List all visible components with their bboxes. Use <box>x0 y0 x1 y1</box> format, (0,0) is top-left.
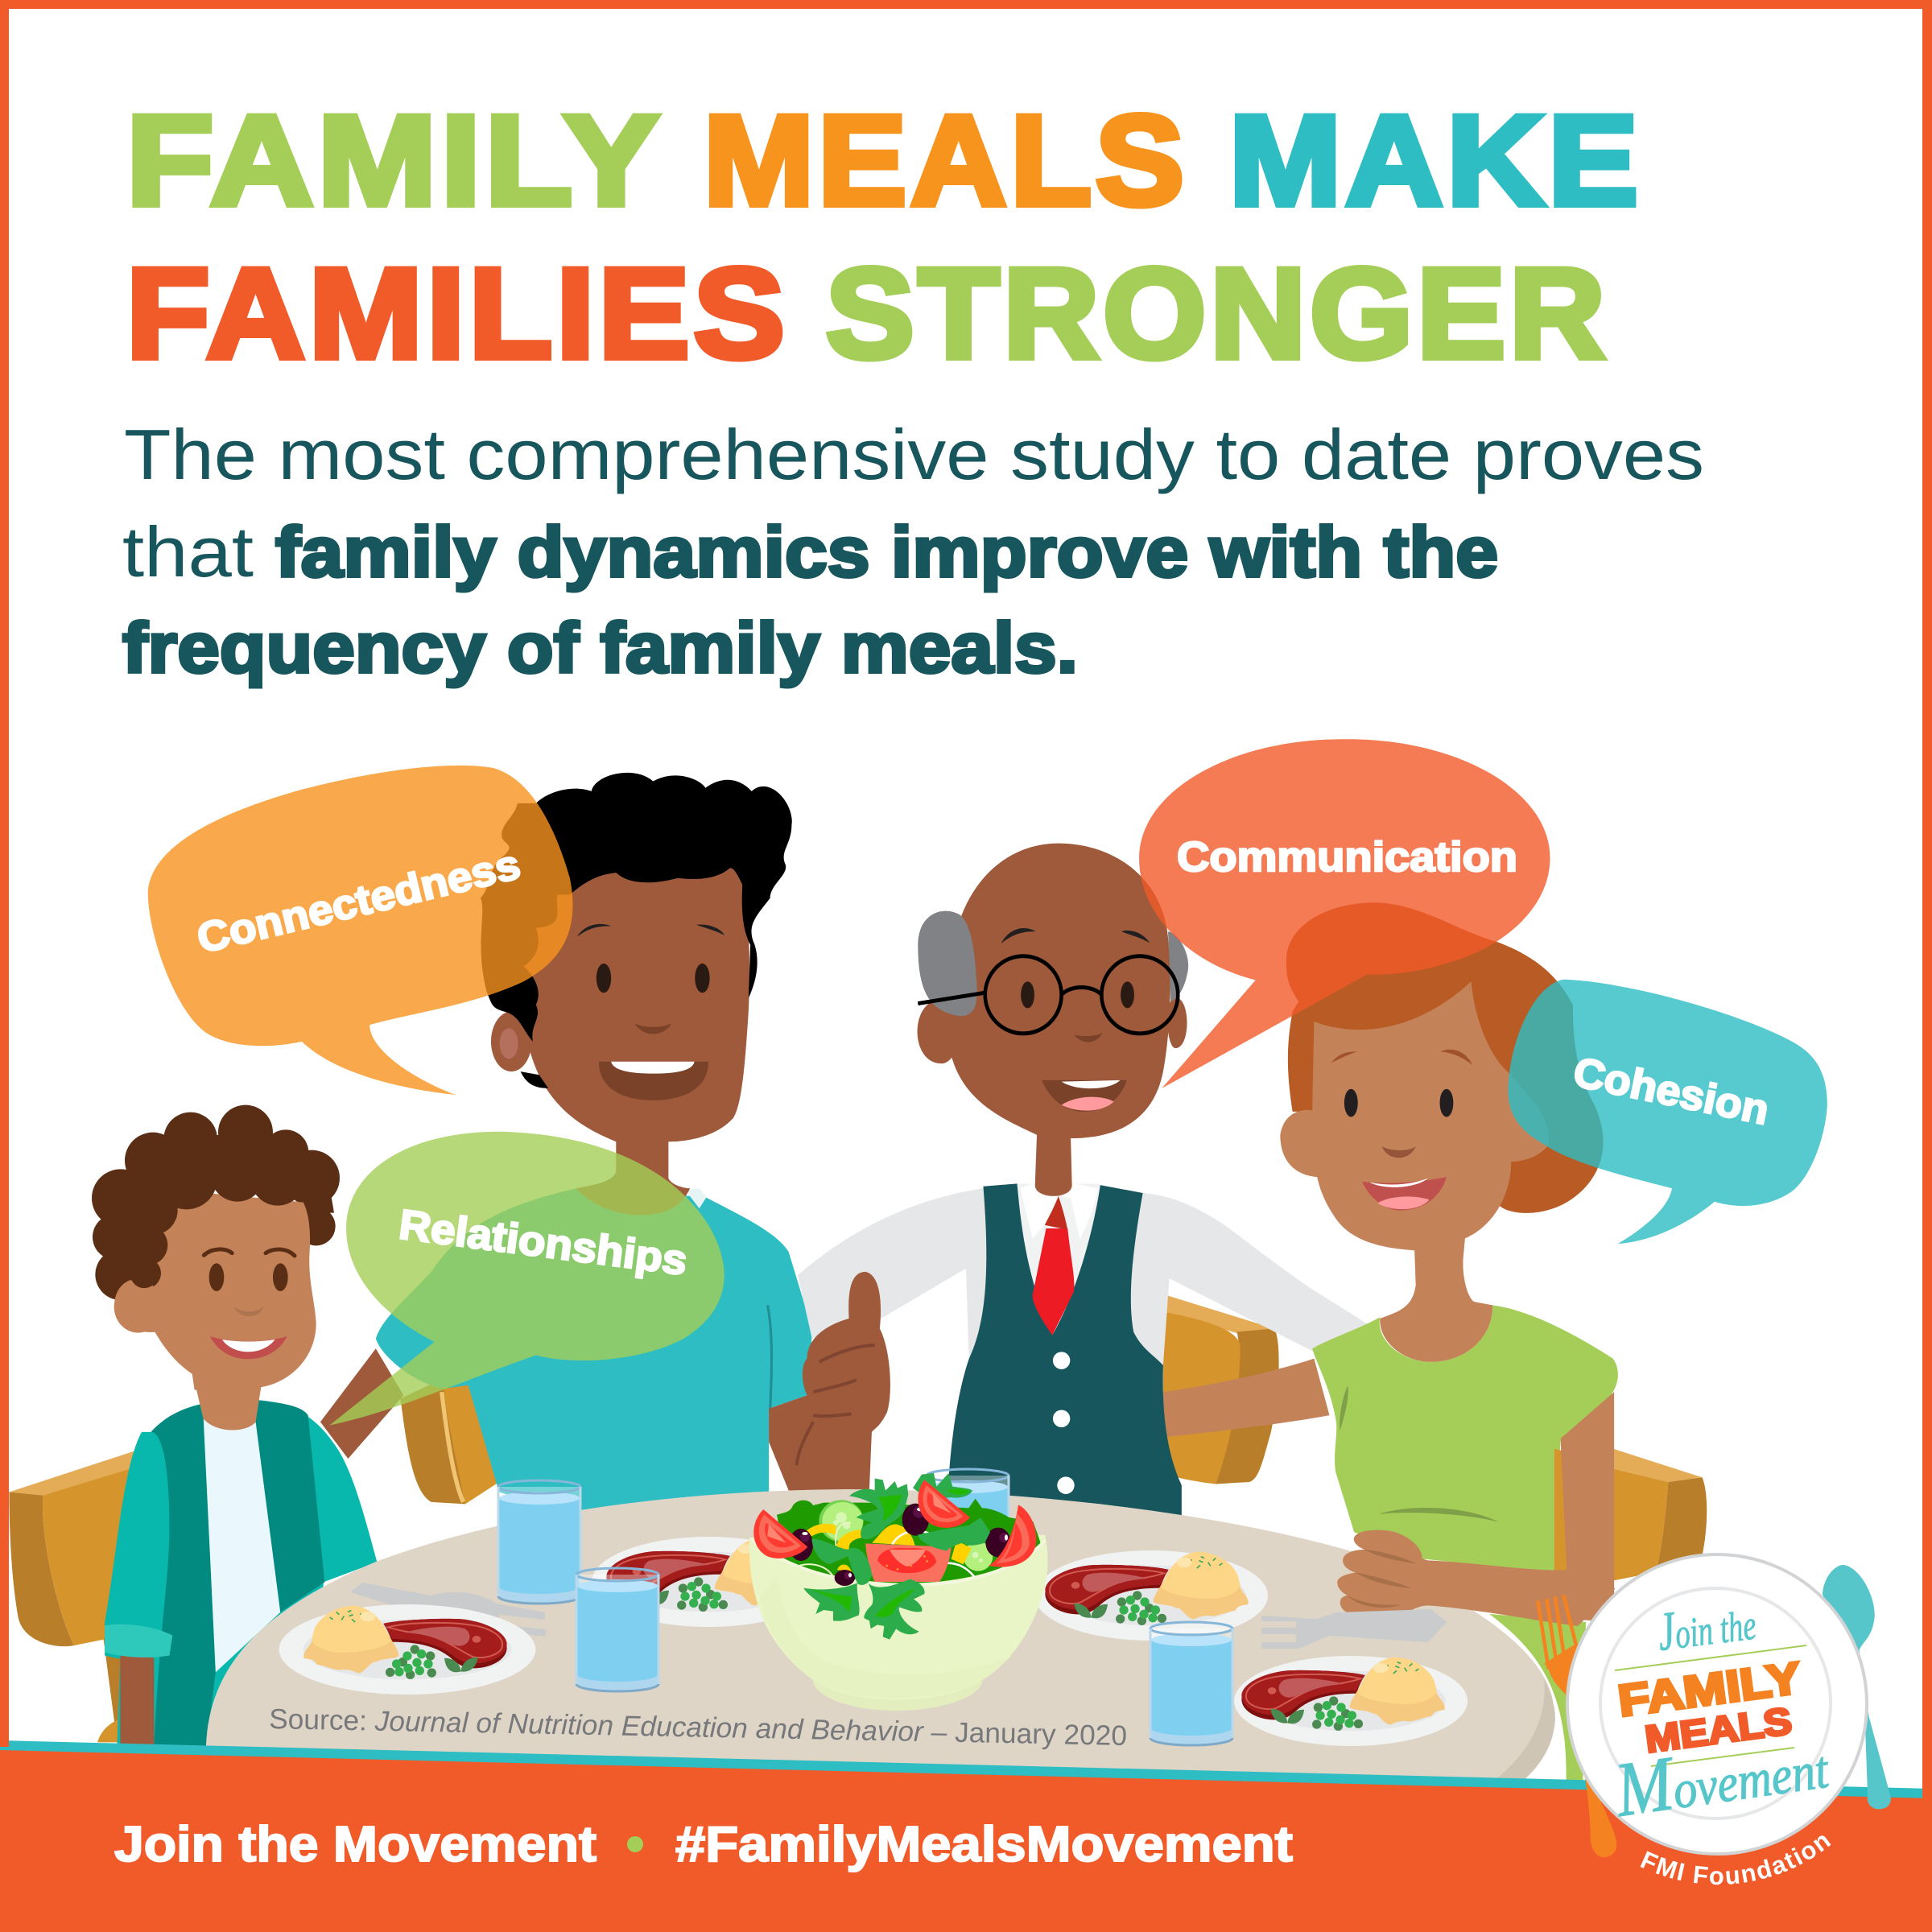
title <box>126 89 1642 385</box>
tomato wedges <box>753 1509 807 1558</box>
boy's lower ear <box>115 1280 161 1332</box>
speech bubble: Connectedness: Connectedness <box>192 841 525 963</box>
logo: text <box>1608 1590 1834 1833</box>
logo: teal spoon <box>1823 1565 1891 1809</box>
shirt left sleeve <box>798 1187 1003 1365</box>
woman's chair strip <box>1554 1449 1567 1571</box>
title: MEALS <box>704 89 1188 232</box>
olives <box>789 1504 1011 1586</box>
boy's mouth <box>210 1336 287 1359</box>
boy's clothing <box>105 1372 377 1746</box>
speech bubble: Communication: Communication <box>1177 834 1517 881</box>
grandfather's ears <box>918 997 1187 1063</box>
father's ear <box>491 1012 531 1071</box>
cucumbers <box>819 1500 864 1542</box>
boy's face <box>147 1189 316 1390</box>
person: grandfather <box>798 844 1369 1519</box>
speech bubble: Relationships <box>329 1132 724 1426</box>
boy's eyebrows <box>204 1249 295 1256</box>
leaf: centre top <box>849 1479 908 1539</box>
onion rings <box>892 1531 974 1576</box>
leaf: top right <box>913 1473 972 1498</box>
subtitle text block: The most comprehensive study to date proves <box>124 415 1704 494</box>
shirt right sleeve <box>1089 1188 1369 1365</box>
cutlery on table left <box>350 1583 546 1637</box>
table edge shade <box>1465 1678 1555 1803</box>
title: FAMILIES <box>126 242 789 385</box>
shirt front <box>1018 1183 1100 1335</box>
footer: hashtag: #FamilyMealsMovement <box>675 1817 1293 1872</box>
woman's face details <box>1344 1089 1358 1117</box>
speech bubble: Relationships: Relationships <box>396 1201 690 1285</box>
woman's head and neck <box>1280 981 1549 1362</box>
source note: Source: Journal of Nutrition Education and Behavior – January 2020 <box>269 1703 1127 1752</box>
hanging leaf right <box>864 1579 925 1640</box>
title: FAMILY <box>126 89 663 232</box>
title: MAKE <box>1229 89 1642 232</box>
subtitle text block: frequency of family meals. <box>122 608 1078 687</box>
logo: orange fork <box>1538 1596 1616 1857</box>
table <box>206 1489 1554 1803</box>
subtitle text block: family dynamics improve with the <box>275 512 1498 592</box>
woman's upper arm <box>1561 1392 1614 1622</box>
logo: text: Movement <box>1608 1718 1834 1833</box>
chairs <box>9 1295 1707 1742</box>
peppers <box>805 1524 998 1572</box>
salad greens <box>757 1499 1041 1583</box>
person: father in teal shirt <box>320 773 812 1519</box>
logo: text: FAMILY <box>1615 1653 1804 1726</box>
woman's t-shirt <box>1312 1305 1618 1572</box>
footer band <box>0 1740 1932 1932</box>
woman's arm across chair <box>1163 1359 1330 1437</box>
father's t-shirt <box>376 1188 812 1519</box>
glasses <box>918 956 1178 1034</box>
woman's lower shirt <box>1489 1614 1586 1795</box>
water glass 2 <box>576 1568 658 1691</box>
grandfather's head <box>947 844 1170 1196</box>
father's hair <box>481 773 792 1042</box>
person: woman <box>1280 902 1618 1622</box>
speech bubble: Communication <box>1139 739 1550 1088</box>
plate: father <box>592 1537 825 1627</box>
woman's hair <box>1286 902 1604 1213</box>
water glass 1 <box>498 1480 580 1604</box>
subtitle text block <box>122 415 1704 687</box>
salad bowl <box>749 1473 1047 1711</box>
boy's ear <box>114 1281 163 1333</box>
logo: text: Join the <box>1654 1590 1759 1662</box>
waistcoat <box>947 1183 1182 1519</box>
logo: text: MEALS <box>1642 1699 1794 1761</box>
speech bubble: Cohesion <box>1508 980 1827 1244</box>
father's head <box>518 824 749 1215</box>
boy's eyes <box>209 1263 288 1291</box>
hair behind face <box>284 1150 340 1245</box>
logo: FMI Foundation curved text: FMI Foundation <box>1641 1835 1831 1885</box>
leaf: right centre <box>918 1517 990 1551</box>
bowl <box>749 1535 1047 1711</box>
water glass 3 <box>927 1469 1009 1592</box>
water glass 4 <box>1150 1622 1232 1745</box>
footer bullet <box>627 1836 643 1852</box>
father's arm <box>320 1348 403 1459</box>
logo: plate <box>1567 1554 1867 1854</box>
subtitle text block: that <box>122 512 254 592</box>
plate: woman <box>1234 1656 1468 1746</box>
grey hair right <box>1168 931 1188 1001</box>
boy's head <box>92 1105 340 1390</box>
grandfather's face details <box>1021 981 1034 1008</box>
woman's hand on table <box>1337 1530 1616 1626</box>
boy's hair <box>92 1105 308 1300</box>
cutlery on table right <box>1261 1609 1447 1649</box>
tie <box>1033 1228 1074 1335</box>
speech bubble: Cohesion: Cohesion <box>1570 1049 1773 1134</box>
speech bubble: Connectedness <box>148 766 572 1095</box>
father's thumbs-up hand <box>769 1272 890 1505</box>
hanging leaf left <box>803 1583 860 1621</box>
left temple hair <box>918 911 977 1016</box>
boy's nose <box>233 1307 264 1316</box>
leaf: left centre <box>811 1539 872 1585</box>
plate: boy <box>279 1604 535 1695</box>
waistcoat buttons <box>1053 1352 1075 1494</box>
footer: join the movement: Join the Movement <box>114 1817 597 1872</box>
title: STRONGER <box>826 242 1609 385</box>
person: boy <box>92 1105 377 1746</box>
father's face details <box>597 964 611 993</box>
plate: grandfather <box>1034 1550 1268 1641</box>
